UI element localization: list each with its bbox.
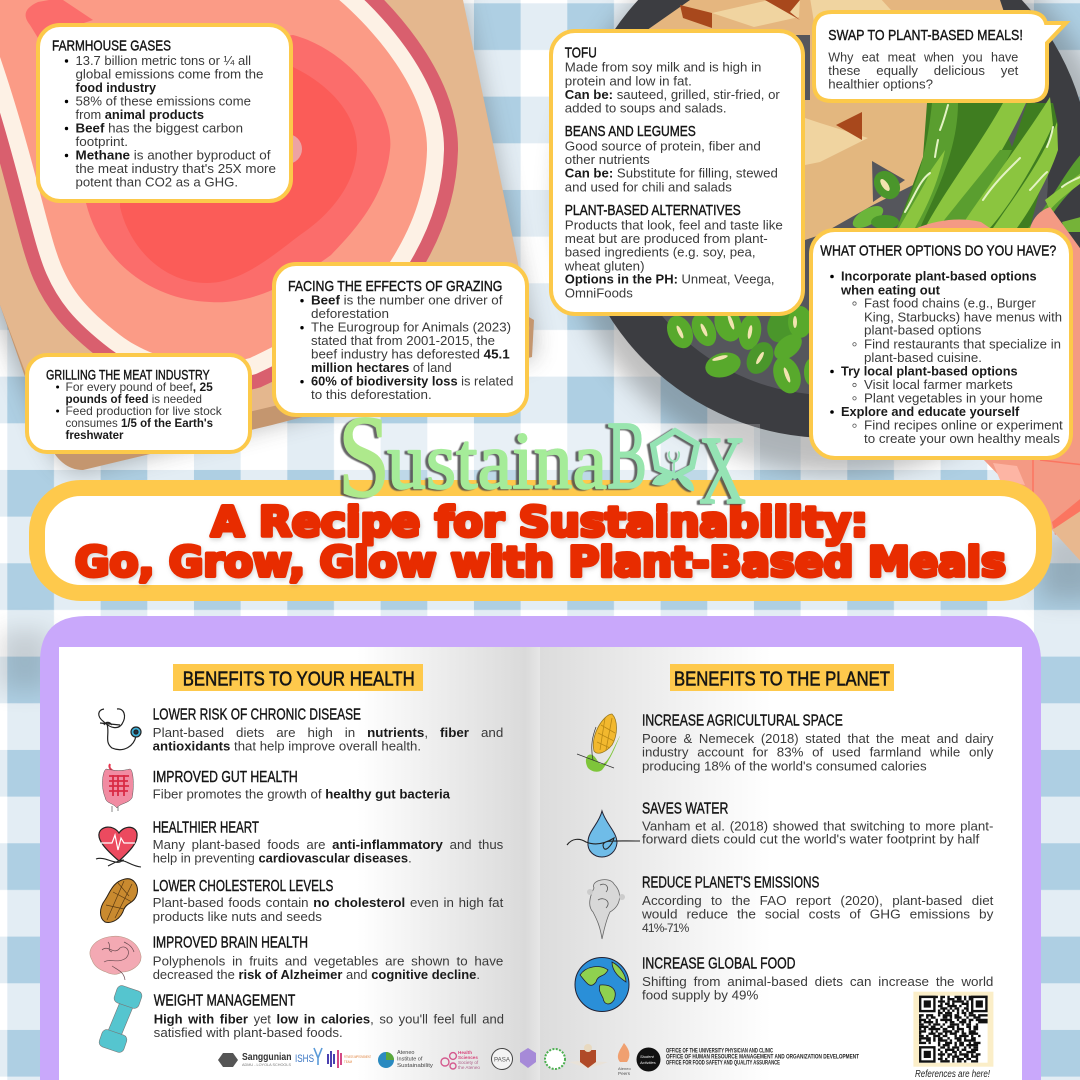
title text: A Recipe for Sustainability:: [211, 498, 868, 546]
logo: Health Sciences Society: Society of: [458, 1060, 479, 1065]
bullet list: Try local plant-based options: [841, 364, 1018, 379]
office names: [666, 1048, 859, 1066]
text: healthier options?: [828, 76, 933, 91]
logo: Ateneo Institute of Sustainability: Ateneo: [397, 1050, 414, 1056]
bullet list: pounds of feed is needed: [66, 392, 202, 406]
logo: PASA: [492, 1048, 512, 1070]
logo: Student Activities: Student: [640, 1054, 655, 1059]
heading: HEALTHIER HEART: [153, 820, 259, 837]
logo: ISHS: [295, 1048, 322, 1065]
bullet list: [65, 53, 276, 190]
icon: stethoscope: [99, 709, 141, 750]
text: forward diets could cut the world's water footprint by half: [642, 832, 980, 847]
logo: ISHS: ISHS: [295, 1053, 314, 1065]
text: High with fiber yet low in calories, so you'll feel full and: [154, 1011, 504, 1026]
top tofu: [640, 0, 1010, 100]
heading: benefits to your health: BENEFITS TO YOUR HEALTH: [183, 668, 415, 690]
text: beans: Can be: Substitute for filling, stewed: [565, 166, 778, 181]
logo: purple cube: [520, 1048, 536, 1068]
bullet list: Incorporate plant-based options: [841, 269, 1037, 284]
bullet list: The Eurogroup for Animals (2023): [311, 320, 511, 335]
text: [153, 837, 504, 866]
logo: Ateneo Institute of Sustainability: [378, 1050, 433, 1069]
logo: Ateneo Institute of Sustainability: Sustainability: [397, 1063, 433, 1069]
logo: Ateneo Peers: [618, 1043, 631, 1076]
bullet list: Fast food chains (e.g., Burger: [864, 296, 1037, 311]
text: beans: [565, 139, 778, 194]
benefit: weight management: [98, 984, 504, 1054]
heading: IMPROVED GUT HEALTH: [153, 769, 298, 786]
benefit: improved gut health: [102, 764, 451, 812]
text: alternatives: OmniFoods: [565, 285, 633, 300]
heading: plant-based alternatives: PLANT-BASED ALTERNATIVES: [565, 202, 741, 219]
heading: LOWER RISK OF CHRONIC DISEASE: [153, 706, 361, 723]
heading: beans and legumes: BEANS AND LEGUMES: [565, 123, 696, 140]
text: help in preventing cardiovascular diseases.: [153, 851, 412, 866]
benefit: lower risk of chronic disease: [99, 706, 503, 754]
bullet list: Beef has the biggest carbon: [76, 120, 243, 136]
bullet list: stated that from 2001-2015, the: [311, 333, 495, 348]
text: Vanham et al. (2018) showed that switching to more plant-: [642, 818, 993, 833]
logo: SustainaBox: S: [338, 391, 390, 522]
bubble: [814, 12, 1066, 101]
text: producing 18% of the world's consumed calories: [642, 758, 927, 773]
heading: INCREASE GLOBAL FOOD: [642, 955, 796, 972]
bullet list: footprint.: [76, 134, 128, 149]
text: products like nuts and seeds: [153, 909, 322, 924]
bullet list: to this deforestation.: [311, 387, 432, 402]
logo: green wreath: [545, 1049, 565, 1069]
logo: PASA: PASA: [494, 1056, 511, 1064]
bullet list: the meat industry that's 25X more: [76, 161, 276, 176]
text: 41%-71%: [642, 921, 690, 935]
heading: SWAP TO PLANT-BASED MEALS!: [828, 27, 1023, 44]
title text: Go, Grow, Glow with Plant-Based Meals: [75, 538, 1006, 586]
bullet list: King, Starbucks) have menus with: [864, 309, 1062, 324]
text: [153, 954, 503, 982]
bullet list: Feed production for live stock: [66, 404, 223, 418]
icon: peanut: [100, 879, 137, 922]
text: decreased the risk of Alzheimer and cognitive decline.: [153, 967, 480, 982]
bullet list: beef industry has deforested 45.1: [311, 347, 510, 362]
bullet list: [300, 293, 513, 402]
text: [153, 725, 503, 754]
text: Many plant-based foods are anti-inflammatory and thus: [153, 837, 504, 852]
text: Plant-based foods contain no cholesterol even in high fat: [153, 895, 504, 910]
title text: [75, 498, 1006, 586]
logo: Fitness Improvement Team: FITNESS IMPROVEMENT: [344, 1054, 371, 1059]
tofu blocks: [805, 100, 1000, 240]
text: beans: Good source of protein, fiber and: [565, 139, 761, 154]
right page: [540, 647, 1022, 1080]
text: tofu: protein and low in fat.: [565, 73, 692, 88]
text: Why eat meat when you have: [828, 50, 1018, 65]
logo: Sanggunian: ADMU - LOYOLA SCHOOLS: [242, 1062, 291, 1067]
text: [153, 895, 504, 924]
logo: SustainaBox: [335, 391, 760, 525]
office names: OFFICE OF HUMAN RESOURCE MANAGEMENT AND ORGANIZATION DEVELOPMENT: [666, 1054, 859, 1060]
bullet list: Plant vegetables in your home: [864, 390, 1043, 405]
bullet list: 58% of these emissions come: [76, 94, 251, 108]
logo: Fitness Improvement Team: [327, 1050, 371, 1068]
bullet list: Beef is the number one driver of: [311, 293, 503, 308]
bullet list: Methane is another byproduct of: [76, 148, 271, 162]
text: Plant-based diets are high in nutrients, fiber and: [153, 725, 503, 740]
panel: farmhouse gases: [38, 25, 291, 201]
pill: [37, 488, 1044, 593]
logo: eagle crest: [569, 1044, 608, 1068]
card: [38, 25, 291, 201]
logo: Ateneo Peers: Ateneo: [618, 1066, 631, 1071]
card: [274, 264, 527, 415]
QR finder squares: [920, 997, 986, 1062]
logo: Student Activities: [636, 1048, 660, 1072]
text: Fiber promotes the growth of healthy gut bacteria: [153, 787, 451, 802]
heading: FARMHOUSE GASES: [52, 38, 171, 55]
bullet list: million hectares of land: [311, 360, 452, 375]
QR code with references caption: [913, 992, 993, 1080]
benefit: saves water: [567, 801, 993, 857]
heading: GRILLING THE MEAT INDUSTRY: [46, 367, 210, 382]
text: antioxidants that help improve overall health.: [153, 739, 421, 754]
logo: Health Sciences Society: [441, 1050, 480, 1070]
logo: Sanggunian: Sanggunian: [242, 1051, 292, 1063]
bullet list: [830, 269, 1063, 446]
text: alternatives: wheat gluten): [564, 258, 644, 273]
text: Poore & Nemecek (2018) stated that the meat and dairy: [642, 731, 994, 746]
bullet list: plant-based options: [864, 323, 982, 338]
speech bubble: swap to plant-based meals: [814, 12, 1066, 101]
logo: Ateneo Peers: Peers: [618, 1071, 631, 1076]
title banner: [37, 488, 1044, 593]
icon: water drop: [567, 811, 640, 857]
icon: brain: [90, 936, 141, 980]
office names: OFFICE OF THE UNIVERSITY PHYSICIAN AND CLINIC: [666, 1048, 773, 1054]
panel: benefits book: [0, 616, 1041, 1080]
text: food supply by 49%: [642, 988, 759, 1003]
text: industry account for 83% of used farmland while only: [642, 745, 994, 760]
bullet list: [56, 380, 223, 442]
text: [642, 818, 993, 847]
bullet list: Explore and educate yourself: [841, 404, 1020, 419]
QR background: [913, 992, 993, 1067]
bullet list: food industry: [76, 80, 157, 95]
text: tofu: [565, 60, 780, 115]
text: [642, 974, 993, 1003]
bullet list: deforestation: [311, 306, 389, 321]
text: [641, 893, 994, 935]
bullet list: 13.7 billion metric tons or ¼ all: [76, 53, 251, 68]
heading: IMPROVED BRAIN HEALTH: [153, 935, 308, 952]
bullet list: global emissions come from the: [76, 66, 264, 82]
bullet list: 60% of biodiversity loss is related: [311, 374, 513, 389]
bullet list: For every pound of beef, 25: [66, 380, 213, 394]
panel: what other options do you have: [811, 230, 1071, 458]
text: tofu: Can be: sauteed, grilled, stir-fried, or: [565, 87, 780, 102]
icon: earth: [575, 958, 629, 1012]
green beans: [897, 103, 1058, 228]
logo: SustainaBox: ustaina: [387, 415, 607, 506]
panel: facing the effects of grazing: [274, 264, 527, 415]
office names: OFFICE FOR FOOD SAFETY AND QUALITY ASSURANCE: [666, 1060, 780, 1066]
card: [27, 355, 250, 452]
text: beans: and used for chili and salads: [565, 179, 732, 194]
left page: [59, 647, 540, 1080]
card: [811, 230, 1071, 458]
logo: Ateneo Institute of Sustainability: Institute of: [397, 1056, 423, 1062]
partner logos row: [218, 1043, 859, 1076]
logo: Health Sciences Society: the Ateneo: [458, 1065, 480, 1070]
icon: heart with pulse: [96, 827, 141, 867]
text: alternatives: Products that look, feel and taste like: [565, 218, 783, 233]
text: beans: other nutrients: [565, 152, 650, 167]
bullet list: potent than CO2 as a GHG.: [76, 174, 238, 190]
heading: LOWER CHOLESTEROL LEVELS: [153, 878, 333, 895]
logo: Health Sciences Society: Health: [458, 1050, 472, 1055]
text: tofu: Made from soy milk and is high in: [565, 60, 761, 75]
text: alternatives: meat but are produced from plant-: [565, 231, 768, 246]
bullet list: consumes 1/5 of the Earth's: [66, 416, 213, 430]
heading: SAVES WATER: [642, 801, 728, 818]
logo: Student Activities: Activities: [639, 1060, 656, 1065]
benefit: increase agricultural space: [577, 712, 994, 773]
edamame pods: [869, 166, 905, 204]
bullet list: Visit local farmer markets: [864, 377, 1013, 392]
heading: WEIGHT MANAGEMENT: [154, 993, 295, 1010]
text: Polyphenols in fruits and vegetables are shown to have: [153, 954, 503, 969]
benefit: increase global food: [575, 955, 993, 1012]
heading: tofu: TOFU: [565, 44, 597, 61]
logo: Sanggunian: [218, 1051, 292, 1067]
text: Shifting from animal-based diets can increase the world: [642, 974, 993, 989]
logo: Fitness Improvement Team: TEAM: [344, 1059, 352, 1064]
QR modules: [919, 996, 988, 1063]
icon: intestines: [102, 764, 133, 812]
logo: SustainaBox: B: [607, 402, 647, 510]
benefit: lower cholesterol levels: [100, 878, 504, 924]
benefit: reduce planet's emissions: [587, 874, 994, 939]
icon: corn: [577, 714, 620, 772]
purple frame: [40, 616, 1041, 1080]
bullet list: plant-based cuisine.: [864, 350, 982, 365]
text: alternatives: based ingredients (e.g. soy, pea,: [565, 245, 756, 260]
QR caption: References are here!: [915, 1069, 990, 1080]
text: [828, 50, 1019, 91]
illustration: salmon fillet and napkin at right edge: [917, 207, 1080, 566]
icon: dumbbell: [98, 984, 143, 1054]
bullet list: from animal products: [76, 107, 204, 122]
text: tofu: added to soups and salads.: [565, 100, 726, 115]
bullet list: to create your own healthy meals: [864, 431, 1060, 446]
text: According to the FAO report (2020), plant-based diet: [642, 893, 994, 908]
heading: INCREASE AGRICULTURAL SPACE: [642, 712, 843, 729]
text: satisfied with plant-based foods.: [154, 1025, 343, 1040]
bullet list: when eating out: [840, 282, 941, 297]
text: [154, 1011, 504, 1040]
illustration: plate with tofu and green beans: [558, 0, 1080, 600]
card: [551, 31, 803, 314]
text: would reduce the social costs of GHG emissions by: [641, 906, 994, 921]
benefit: improved brain health: [90, 935, 503, 982]
benefit: healthier heart: [96, 820, 504, 867]
panel: grilling the meat industry: [27, 355, 250, 452]
heading: FACING THE EFFECTS OF GRAZING: [288, 278, 502, 295]
heading: REDUCE PLANET'S EMISSIONS: [642, 874, 819, 891]
heading: benefits to the planet: BENEFITS TO THE PLANET: [674, 668, 890, 690]
logo: SustainaBox: X: [699, 417, 746, 525]
bullet list: Find recipes online or experiment: [864, 418, 1063, 433]
text: alternatives: [564, 218, 783, 300]
icon: smoke: [587, 880, 625, 939]
text: these equally delicious yet: [828, 63, 1019, 78]
text: alternatives: Options in the PH: Unmeat, Veega,: [565, 272, 774, 287]
panel: tofu, beans, alternatives: [551, 31, 803, 314]
illustration: cutting board with meat: [0, 0, 534, 472]
bullet list: freshwater: [66, 428, 124, 442]
text: [642, 731, 994, 773]
logo: Health Sciences Society: Sciences: [458, 1055, 478, 1060]
bullet list: Find restaurants that specialize in: [864, 336, 1061, 351]
